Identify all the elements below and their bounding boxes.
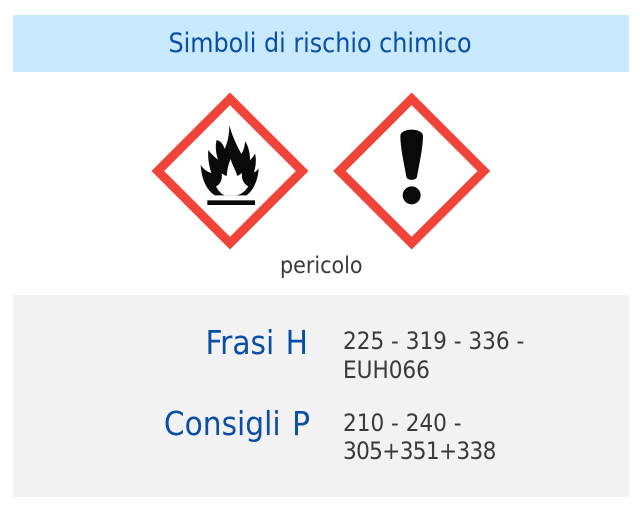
text: P codes: 305+351+338 <box>343 437 496 465</box>
text: P codes: 210 - 240 - <box>343 409 462 437</box>
title: Simboli di rischio chimico <box>168 28 472 59</box>
label: pericolo: pericolo <box>280 253 363 279</box>
heading: Consigli P: Consigli P <box>164 404 310 443</box>
text: H codes: EUH066 <box>343 356 430 384</box>
icon: flammable hazard pictogram <box>152 92 308 250</box>
title banner <box>13 15 629 72</box>
text: H codes: 225 - 319 - 336 - <box>343 327 524 355</box>
panel: hazard codes <box>13 295 629 497</box>
text: P codes <box>343 409 496 465</box>
heading: Frasi H: Frasi H <box>205 323 308 362</box>
text: H codes <box>343 327 524 384</box>
icon: exclamation mark hazard pictogram <box>333 92 490 250</box>
